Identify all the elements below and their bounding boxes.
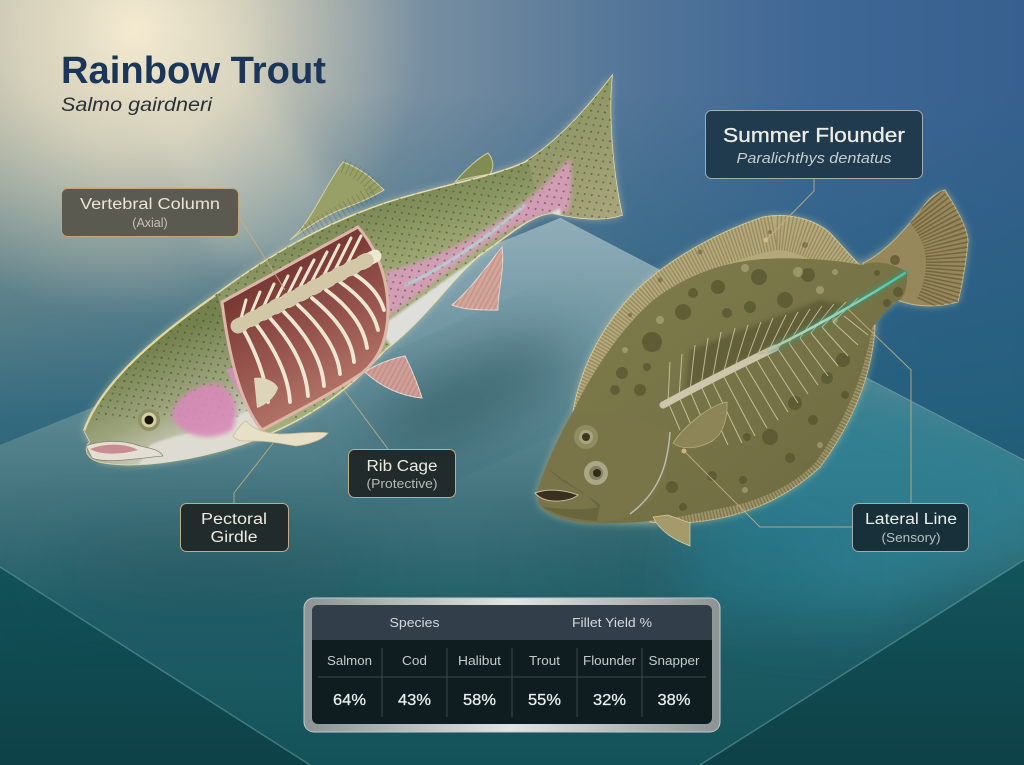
illustration: summer flounder [535, 190, 968, 546]
table yield row: 58% [463, 692, 496, 709]
label: vertebral column: Vertebral Column [80, 196, 220, 213]
flounder tail [863, 190, 968, 317]
label: summer flounder: Paralichthys dentatus [736, 151, 892, 167]
trout body [84, 76, 622, 465]
flounder skeleton [668, 298, 868, 445]
flounder head [537, 412, 670, 523]
lower rib bones [243, 274, 384, 402]
table yield row: 32% [593, 692, 626, 709]
label: pectoral girdle: Girdle [210, 529, 258, 546]
trout pink stripe [386, 158, 572, 318]
flounder eyes [574, 425, 608, 485]
flounder dorsal fin [568, 215, 862, 420]
label: summer flounder [706, 110, 922, 178]
table species row: Halibut [458, 653, 501, 668]
trout mouth [86, 442, 163, 461]
label: lateral line: (Sensory) [882, 531, 940, 545]
trout belly [386, 208, 562, 346]
label: lateral line: Lateral Line [865, 511, 957, 528]
table species row [327, 653, 700, 668]
cut-away rib cage [222, 227, 388, 430]
table yield row: 55% [528, 692, 561, 709]
table species row: Salmon [327, 653, 372, 668]
illustration: rainbow trout [80, 74, 626, 470]
table species row: Trout [529, 653, 560, 668]
flounder anal fin [650, 325, 875, 526]
table species row: Cod [402, 653, 427, 668]
label: vertebral column: (Axial) [132, 216, 168, 230]
label: rib cage: (Protective) [366, 477, 438, 491]
cast shadows [40, 316, 830, 594]
table yield row: 38% [658, 692, 691, 709]
leader lines [234, 179, 911, 527]
trout cheek [172, 384, 236, 437]
floor platform [0, 218, 1024, 765]
flounder spots [610, 255, 903, 511]
trout fins [290, 153, 503, 398]
label: vertebral column [62, 188, 238, 236]
flounder pectoral fin [673, 402, 727, 448]
upper rib bones [240, 236, 361, 322]
table yield row: 64% [333, 692, 366, 709]
subtitle: Salmo gairdneri [61, 94, 213, 116]
table: fillet yield by species [304, 598, 720, 732]
table header [312, 605, 712, 640]
flounder spine and lateral line [663, 273, 905, 405]
title: Rainbow Trout [61, 50, 326, 92]
title [61, 50, 326, 116]
vertebral column [238, 256, 375, 326]
lateral line [405, 205, 525, 285]
label: rib cage: Rib Cage [366, 458, 438, 475]
table species row: Snapper [648, 653, 700, 668]
label: pectoral girdle: Pectoral [201, 511, 267, 528]
table header: Fillet Yield % [572, 615, 652, 630]
flounder body [537, 258, 907, 523]
label: lateral line [852, 504, 968, 552]
label: rib cage [348, 450, 456, 498]
trout eye [138, 409, 160, 431]
flounder mouth [535, 490, 578, 501]
label: pectoral girdle [180, 504, 288, 552]
table header: Species [390, 615, 440, 630]
pectoral girdle bone [233, 421, 328, 446]
table yield row: 43% [398, 692, 431, 709]
table yield row [333, 692, 691, 709]
table species row: Flounder [583, 653, 637, 668]
label: summer flounder: Summer Flounder [723, 124, 905, 147]
